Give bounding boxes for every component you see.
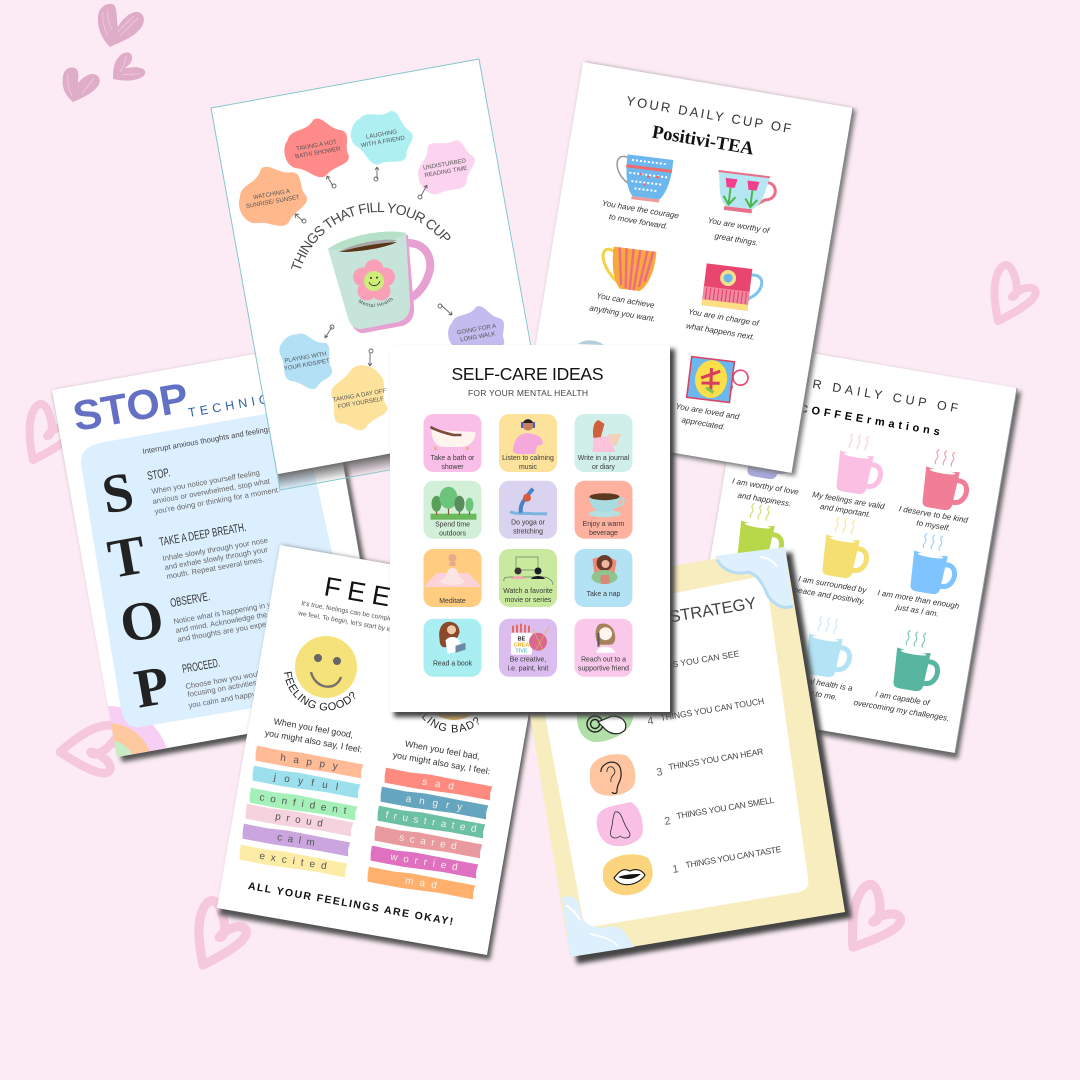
- closing line: ALL YOUR FEELINGS ARE OKAY!: [247, 880, 454, 928]
- section: stop: STOP.: [146, 465, 171, 483]
- row: taste: THINGS YOU CAN TASTE: [685, 844, 782, 870]
- tile: watch a movie: movie or series: [505, 597, 552, 604]
- blob: long walk: GOING FOR A: [457, 324, 497, 336]
- affirmation text lines: and happiness.: [737, 491, 792, 508]
- section: observe: and thoughts are you experiencing.: [177, 615, 295, 644]
- tile: be creative: i.e. paint, knit: [508, 665, 548, 672]
- affirmation text lines: great things.: [714, 231, 759, 248]
- cloud: bottom left corner: [562, 896, 634, 957]
- tile: journal: Write in a journal: [578, 455, 630, 462]
- affirmation text lines: I am worthy of love: [732, 476, 800, 497]
- icon: blue and yellow teacup: [687, 357, 750, 404]
- affirmation text lines: just as I am.: [894, 602, 939, 619]
- label: feeling bad curved: FEELING BAD?: [419, 713, 479, 732]
- blob: long walk: LONG WALK: [460, 331, 496, 343]
- section: proceed: Choose how you would like to respond,: [185, 659, 316, 691]
- tile: be creative: BE: [518, 637, 526, 643]
- blob: playing with kids: YOUR KIDS/PET: [284, 358, 331, 372]
- blob: undisturbed reading: READING TIME: [424, 166, 468, 179]
- intro text: we feel. To begin, let's start by identifying them together.: [297, 610, 460, 645]
- heading: your daily cup of: YOUR DAILY CUP OF: [625, 93, 792, 136]
- large letter P: P: [130, 654, 174, 720]
- intro line: Interrupt anxious thoughts and feelings with this tool.: [142, 416, 318, 456]
- section: proceed: you calm and happy.: [188, 689, 258, 710]
- strip: proud: proud: [274, 811, 323, 830]
- blob: watching a sunrise: WATCHING A: [253, 189, 291, 201]
- affirmation text lines: I am surrounded by: [798, 574, 868, 595]
- affirmation text lines: You are loved and: [675, 402, 741, 421]
- blob: playing with kids: PLAYING WITH: [284, 351, 327, 365]
- row: smell: 2: [664, 815, 672, 828]
- row: smell: THINGS YOU CAN SMELL: [676, 795, 775, 821]
- affirmation text lines: You are in charge of: [687, 307, 760, 328]
- section: stop: anxious or overwhelmed, stop what: [152, 476, 271, 506]
- blob: day off: TAKING A DAY OFF: [333, 388, 387, 404]
- flower badge: [353, 260, 395, 300]
- tile: meditate: [424, 549, 482, 607]
- blob: watching a sunrise: SUNRISE/ SUNSET: [246, 195, 301, 210]
- panel: things that fill your cup page: [210, 58, 532, 491]
- blob: watching a sunrise: [233, 161, 311, 233]
- row: hear: [656, 746, 764, 779]
- affirmation text lines: [732, 476, 969, 723]
- strip: happy: [254, 746, 364, 778]
- section: stop: you're doing or thinking for a moment.: [154, 485, 281, 516]
- icon: purple mug: [745, 417, 798, 482]
- left prompt: When you feel good,: [273, 716, 354, 740]
- row: hear: 3: [656, 766, 664, 779]
- affirmation text lines: priority to me.: [788, 685, 838, 702]
- icon: heart outline, bottom right: [849, 883, 905, 953]
- affirmation text lines: You are worthy of: [707, 216, 771, 235]
- strip: angry: [379, 787, 489, 819]
- tile: be creative: Be creative,: [510, 657, 546, 664]
- icon: heart outline, right: [994, 265, 1036, 321]
- tile: bath: shower: [441, 464, 464, 471]
- row: see: THINGS YOU CAN SEE: [645, 648, 740, 674]
- blob: hot bath: BATH/ SHOWER: [295, 146, 342, 160]
- row: taste: 1: [672, 863, 680, 876]
- right prompt: you might also say, I feel:: [392, 750, 491, 777]
- blob: playing with kids: [266, 318, 347, 402]
- tile: yoga: stretching: [513, 529, 543, 536]
- icon: rose mug: [920, 448, 973, 513]
- panel: coffee affirmations page: [685, 342, 1021, 759]
- panel: 5-4-3-2-1 strategy page: [510, 547, 852, 964]
- section: proceed: PROCEED.: [181, 656, 221, 676]
- tile: watch a movie: [499, 549, 557, 607]
- strip: confident: [248, 788, 358, 820]
- section: stop: [146, 465, 281, 516]
- row: see: 5: [631, 670, 639, 683]
- icon: blue mug: [908, 532, 961, 597]
- tile: bath: [424, 414, 482, 472]
- label: feeling good curved: FEELING GOOD?: [284, 672, 356, 710]
- row: see: [631, 648, 740, 683]
- tile: watch a movie: Watch a favorite: [503, 588, 553, 595]
- blob: day off: [310, 348, 410, 449]
- subheading: FOR YOUR MENTAL HEALTH: [468, 388, 588, 398]
- section: proceed: focusing on activities that make: [187, 672, 292, 699]
- row: touch: 4: [647, 715, 655, 728]
- section: take a deep breath: [158, 520, 269, 581]
- blob: long walk: [436, 292, 518, 371]
- affirmation text lines: peace and positivity.: [792, 585, 866, 606]
- affirmation text lines: appreciated.: [681, 415, 726, 432]
- icon: heart outline, bottom left: [199, 901, 246, 965]
- tile: reach out: [574, 619, 632, 677]
- blob: hot bath: TAKING A HOT: [296, 139, 338, 153]
- rainbow corner decoration: [108, 706, 167, 757]
- blob: laughing with a friend: WITH A FRIEND: [361, 135, 406, 149]
- heading: curved title: THINGS THAT FILL YOUR CUP: [290, 202, 450, 269]
- icon: yellow mug: [820, 516, 873, 581]
- icon: touch hand: [577, 701, 633, 742]
- strip: calm: calm: [276, 832, 316, 849]
- icon: lime mug: [735, 502, 788, 567]
- large letter S: S: [97, 460, 138, 525]
- icon: heart outline, lower left: [58, 718, 134, 788]
- section: observe: OBSERVE.: [169, 589, 211, 610]
- tile: music: Listen to calming: [502, 455, 554, 462]
- section: observe: Notice what is happening in your body: [173, 595, 301, 626]
- heading: technique: TECHNIQUE: [187, 387, 299, 420]
- strip: joyful: [251, 766, 361, 798]
- tile: read a book: [424, 619, 482, 677]
- blob: day off: FOR YOURSELF: [337, 396, 385, 410]
- affirmation text lines: [589, 199, 771, 432]
- cloud: top right corner: [715, 547, 793, 608]
- strip: sad: [383, 768, 493, 800]
- tile: be creative: [499, 619, 557, 677]
- affirmation text lines: My feelings are valid: [812, 490, 886, 511]
- icon: sad smiley: [423, 658, 485, 720]
- white inner panel: [530, 578, 808, 926]
- left prompt: you might also say, I feel:: [264, 728, 363, 755]
- strip: angry: angry: [405, 794, 463, 813]
- heading: self-care ideas: SELF-CARE IDEAS: [452, 364, 604, 384]
- affirmation text lines: Mental health is a: [790, 674, 854, 693]
- strip: mad: mad: [404, 876, 438, 891]
- icon: red square teacup: [702, 263, 763, 312]
- tile: be creative: CREA: [514, 643, 529, 649]
- affirmation text lines: anything you want.: [589, 303, 656, 324]
- tile: outdoors: outdoors: [439, 531, 466, 538]
- icon: cluster of three hearts, top left: [63, 4, 145, 102]
- strip: joyful: joyful: [272, 772, 339, 793]
- section: stop: When you notice yourself feeling: [151, 468, 260, 496]
- strip: worried: worried: [388, 852, 458, 873]
- strip: calm: [241, 824, 351, 856]
- tile: warm beverage: Enjoy a warm: [583, 521, 625, 528]
- tile: be creative: TIVE: [515, 649, 528, 655]
- icon: heart outline, behind STOP page: [30, 404, 71, 460]
- strip: scared: [373, 826, 483, 858]
- icon: happy smiley: [295, 636, 357, 698]
- icon: sky mug: [803, 615, 856, 680]
- section: take a deep breath: Inhale slowly through your nose: [162, 536, 269, 563]
- panel: Positivi-TEA page: [522, 62, 856, 476]
- affirmation text lines: I am capable of: [875, 690, 931, 708]
- affirmation text lines: I deserve to be kind: [898, 504, 969, 525]
- panel: STOP technique page: [51, 353, 368, 765]
- affirmation text lines: what happens next.: [685, 321, 755, 342]
- tile: meditate: Meditate: [439, 598, 466, 605]
- affirmation text lines: I am more than enough: [877, 588, 960, 611]
- tile: outdoors: [424, 481, 482, 539]
- tile: bath: Take a bath or: [431, 455, 475, 462]
- blob: undisturbed reading: UNDISTURBED: [423, 158, 467, 172]
- panel: feelings page: [216, 543, 532, 963]
- arrows from mug to blobs: [295, 167, 452, 366]
- section: take a deep breath: TAKE A DEEP BREATH.: [158, 520, 247, 549]
- strip: proud: [244, 804, 354, 836]
- strip: mad: [366, 867, 476, 899]
- blob: undisturbed reading: [402, 125, 488, 208]
- affirmation text lines: to move forward.: [608, 212, 669, 231]
- heading: Positivi-TEA: Positivi-TEA: [651, 123, 756, 160]
- heading: FEELINGS: FEELINGS: [322, 571, 514, 634]
- tile: warm beverage: [574, 481, 632, 539]
- tile: yoga: Do yoga or: [511, 520, 546, 527]
- affirmation text lines: and important.: [819, 502, 871, 519]
- tile: nap: [574, 549, 632, 607]
- tile: music: music: [519, 464, 538, 471]
- affirmation text lines: to myself.: [916, 518, 951, 533]
- right prompt: When you feel bad,: [404, 739, 481, 762]
- section: observe: [169, 589, 301, 644]
- heading: your daily cup of: YOUR DAILY CUP OF: [774, 371, 963, 416]
- section: observe: and mind. Acknowledge the feelings: [175, 605, 296, 635]
- blue content panel: [81, 408, 358, 727]
- strip: sad: sad: [421, 777, 455, 792]
- tile: nap: Take a nap: [587, 591, 621, 598]
- section: proceed: [181, 656, 316, 710]
- panel: self-care ideas page: [390, 345, 675, 717]
- tile: music: [499, 414, 557, 472]
- affirmation text lines: You can achieve: [596, 291, 656, 310]
- blob: laughing with a friend: LAUGHING: [366, 129, 398, 141]
- blob: hot bath: [272, 105, 362, 190]
- icon: light blue tulip teacup: [714, 170, 777, 216]
- intro text: It's true, feelings can be complex and hard to name when: [301, 600, 467, 636]
- tile: outdoors: Spend time: [435, 522, 470, 529]
- strip: worried: [369, 846, 479, 878]
- heading: COFFEErmations: COFFEErmations: [799, 403, 945, 439]
- icon: cup peeking behind self-care page: [578, 340, 604, 345]
- heading: STOP: STOP: [69, 374, 192, 440]
- icon: blue floral teacup: [613, 153, 673, 204]
- tile: reach out: Reach out to a: [581, 657, 626, 664]
- row: touch: THINGS YOU CAN TOUCH: [660, 696, 765, 723]
- heading: strategy: 5-4-3-2-1 STRATEGY: [597, 594, 758, 638]
- icon: ear: [590, 754, 635, 796]
- row: hear: THINGS YOU CAN HEAR: [668, 746, 764, 772]
- large letter O: O: [115, 587, 168, 655]
- affirmation text lines: You have the courage: [601, 199, 680, 221]
- strip: scared: scared: [398, 833, 457, 852]
- strip: excited: excited: [258, 851, 327, 872]
- tile: journal: [574, 414, 632, 472]
- affirmation text lines: overcoming my challenges.: [853, 698, 950, 723]
- icon: nose: [597, 802, 643, 846]
- strip: excited: [238, 845, 348, 877]
- strip: frustrated: [376, 806, 486, 838]
- tile: read a book: Read a book: [433, 661, 473, 668]
- icon: lips: [603, 854, 653, 895]
- tile: yoga: [499, 481, 557, 539]
- icon: mental health mug: [328, 232, 434, 334]
- icon: orange striped teacup: [599, 245, 657, 293]
- tile: reach out: supportive friend: [578, 665, 629, 672]
- section: take a deep breath: mouth. Repeat several times.: [166, 555, 265, 581]
- strip: happy: happy: [279, 753, 338, 772]
- tile: warm beverage: beverage: [589, 530, 618, 537]
- strip: frustrated: frustrated: [385, 810, 477, 835]
- mug label: Mental Health: [358, 298, 393, 307]
- blob: laughing with a friend: [334, 89, 430, 184]
- tile: journal: or diary: [592, 464, 616, 471]
- large letter T: T: [103, 524, 150, 590]
- strip: confident: confident: [259, 792, 347, 817]
- icon: pink mug: [834, 432, 887, 497]
- section: take a deep breath: and exhale slowly through your: [164, 545, 269, 572]
- icon: teal mug: [891, 629, 944, 694]
